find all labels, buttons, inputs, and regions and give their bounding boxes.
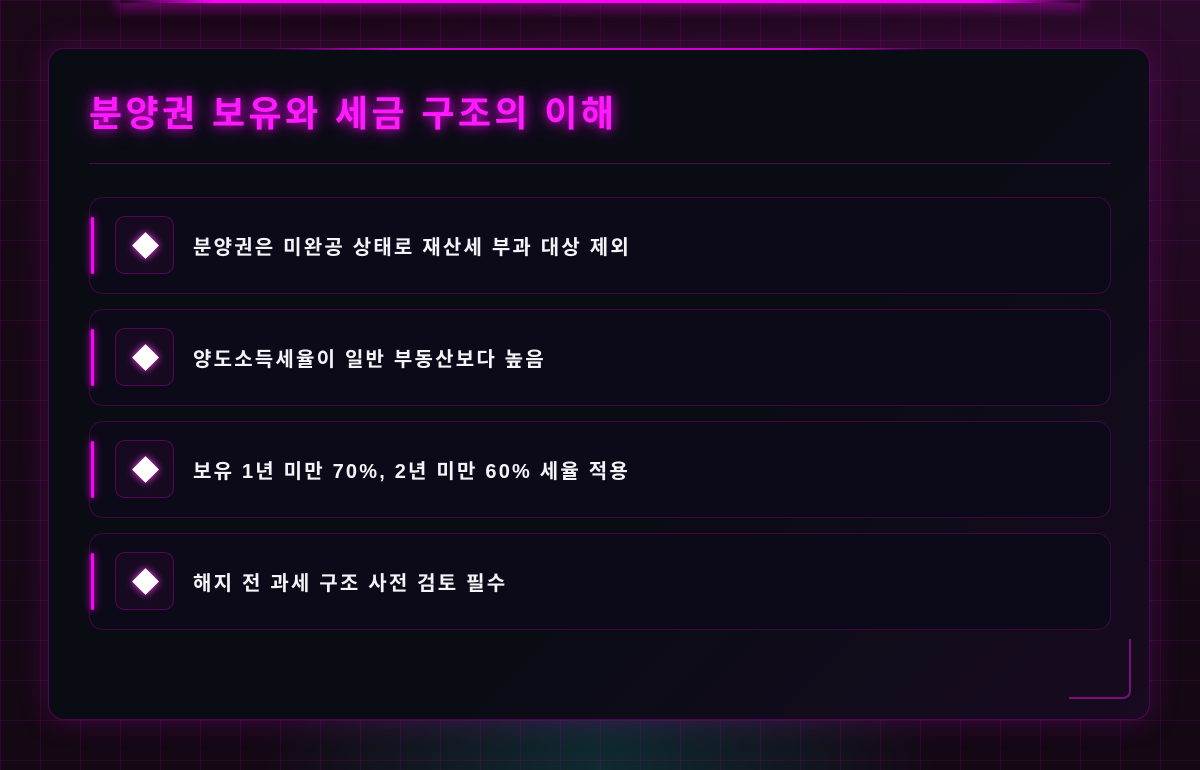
text 3: 보유 1년 미만 70%, 2년 미만 60% 세율 적용 xyxy=(193,461,630,483)
item 2 xyxy=(89,309,1111,406)
icon: diamond xyxy=(115,328,174,386)
top glow bar xyxy=(120,0,1080,3)
item 4 xyxy=(89,533,1111,630)
text 4: 해지 전 과세 구조 사전 검토 필수 xyxy=(193,573,507,595)
icon: diamond xyxy=(115,440,174,498)
icon: diamond xyxy=(115,552,174,610)
title: 분양권 보유와 세금 구조의 이해 xyxy=(89,93,617,134)
item 1 xyxy=(89,197,1111,294)
corner accent xyxy=(1069,639,1131,699)
text 2: 양도소득세율이 일반 부동산보다 높음 xyxy=(193,349,546,371)
item 3 xyxy=(89,421,1111,518)
icon: diamond xyxy=(115,216,174,274)
text 1: 분양권은 미완공 상태로 재산세 부과 대상 제외 xyxy=(193,237,631,259)
